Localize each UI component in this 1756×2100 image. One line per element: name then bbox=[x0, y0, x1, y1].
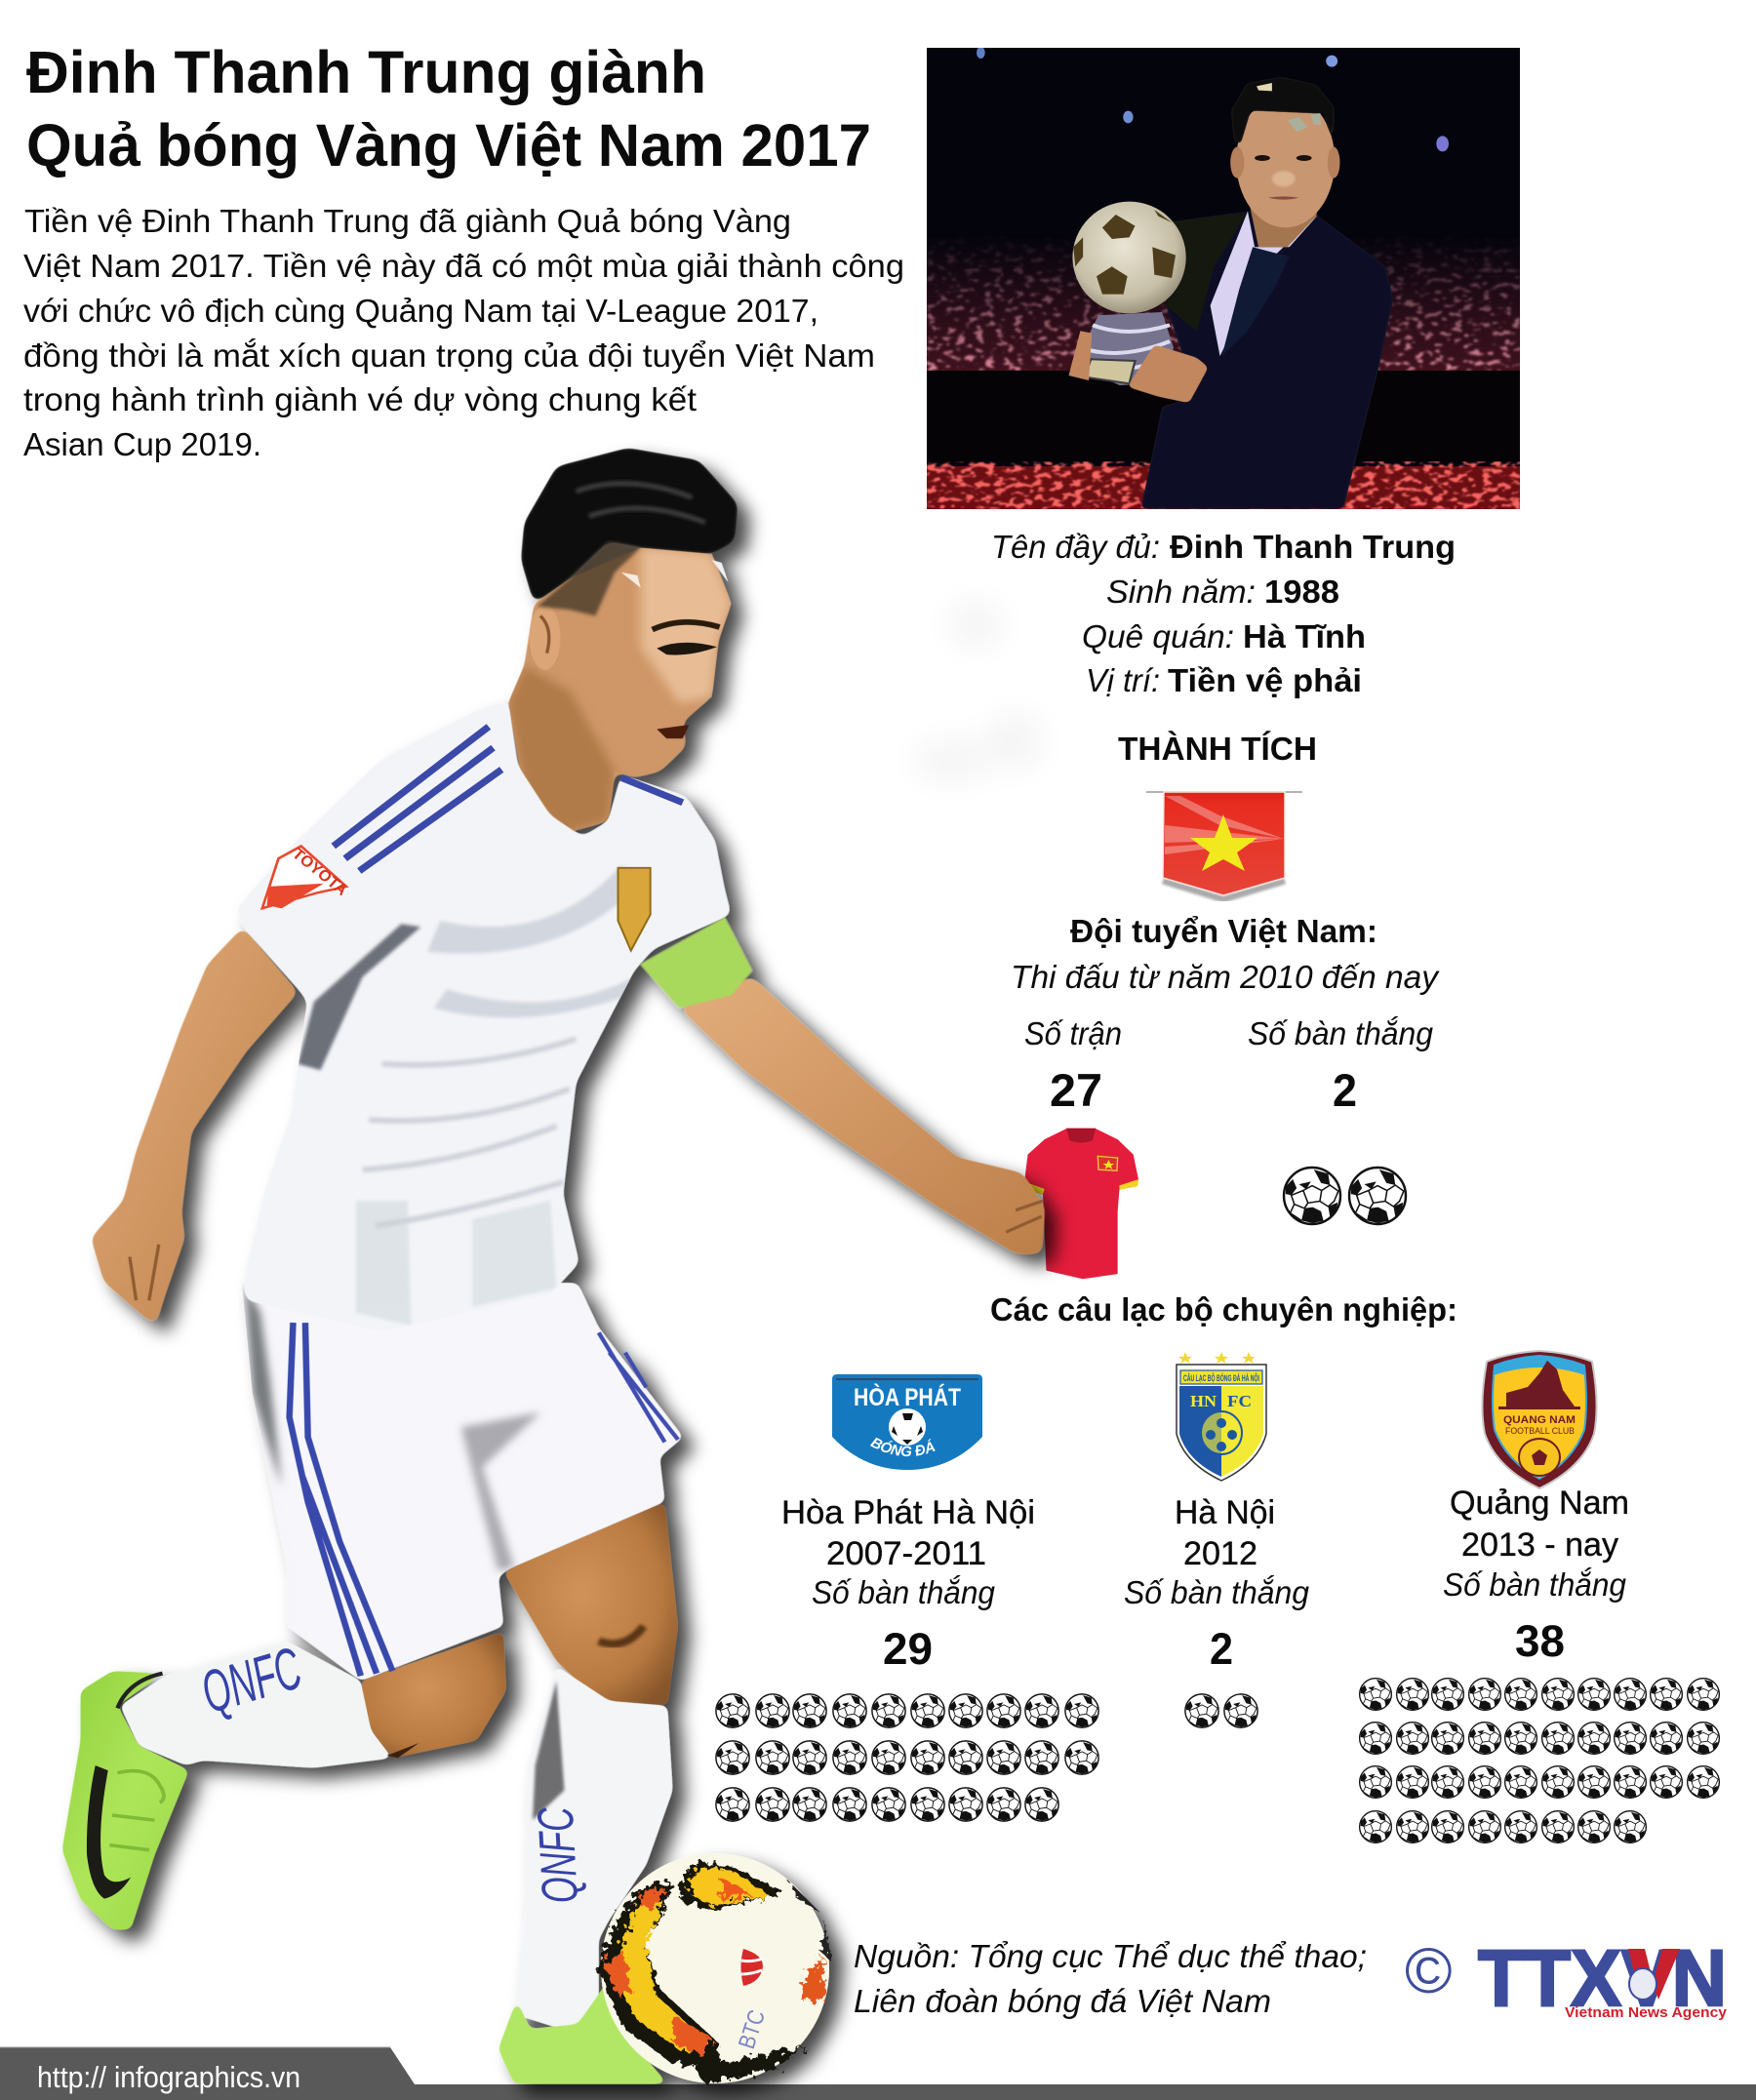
panel: Quang Nam: 2013 - nay bbox=[1461, 1526, 1618, 1564]
panel: Quang Nam: 38 bbox=[1515, 1616, 1565, 1666]
intro text block: Asian Cup 2019. bbox=[23, 426, 261, 462]
icon: Vietnam flag ribbon bbox=[1146, 792, 1302, 899]
goal balls: 38 bbox=[1360, 1679, 1719, 1842]
player info text: Tiền vệ phải bbox=[1168, 662, 1362, 698]
logo: Ha Noi FC: FC bbox=[1227, 1392, 1252, 1410]
back foot shoe bbox=[62, 1671, 189, 1929]
panel: Quang Nam: Quảng Nam bbox=[1450, 1485, 1629, 1522]
back thigh bbox=[361, 1631, 506, 1758]
logo: TTXVN: TTXVN bbox=[1478, 1934, 1727, 2023]
neck and face bbox=[508, 547, 732, 834]
player info text: Đinh Thanh Trung bbox=[1170, 529, 1456, 565]
left arm bbox=[91, 927, 298, 1326]
player info text: Vị trí: bbox=[1086, 662, 1160, 698]
panel: Hoa Phat Ha Noi: 29 bbox=[883, 1624, 933, 1674]
lower body: QNFC bbox=[528, 1805, 589, 1905]
panel: Hoa Phat Ha Noi: 2007-2011 bbox=[826, 1535, 986, 1572]
captain armband bbox=[641, 918, 752, 1008]
source note: Nguồn: Tổng cục Thể dục thể thao; bbox=[854, 1938, 1367, 1974]
goal balls: 2 bbox=[1185, 1694, 1257, 1727]
panel: Ha Noi: 2012 bbox=[1183, 1535, 1257, 1572]
shirt bbox=[236, 700, 732, 1331]
player info text bbox=[991, 529, 1456, 698]
panel: Hoa Phat Ha Noi: Số bàn thắng bbox=[812, 1574, 996, 1610]
footer url: http:// infographics.vn bbox=[37, 2060, 300, 2094]
source note: Liên đoàn bóng đá Việt Nam bbox=[854, 1983, 1271, 2019]
panel: Ha Noi: Số bàn thắng bbox=[1124, 1574, 1310, 1610]
logo: Quang Nam FC: FOOTBALL CLUB bbox=[1505, 1426, 1575, 1436]
shorts bbox=[242, 1283, 683, 1681]
footer band bbox=[0, 2047, 1756, 2100]
title: Đinh Thanh Trung giành bbox=[26, 39, 706, 105]
front shoe bbox=[499, 1979, 667, 2083]
back leg calf and sock bbox=[120, 1641, 392, 1768]
logo: Hoa Phat bbox=[832, 1374, 982, 1470]
logo: TTXVN: Vietnam News Agency bbox=[1565, 2004, 1728, 2021]
logo: Hoa Phat: HÒA PHÁT bbox=[854, 1382, 961, 1411]
club badge bbox=[618, 868, 651, 951]
intro text block: đồng thời là mắt xích quan trọng của đội tuyển Việt Nam bbox=[23, 337, 875, 374]
logo: Quang Nam FC: QUANG NAM bbox=[1503, 1414, 1576, 1426]
national team text: Thi đấu từ năm 2010 đến nay bbox=[1011, 959, 1441, 995]
national team text: Đội tuyển Việt Nam: bbox=[1070, 913, 1377, 949]
intro text block: Việt Nam 2017. Tiền vệ này đã có một mùa giải thành công bbox=[23, 248, 904, 284]
national team text bbox=[1011, 913, 1441, 1116]
match ball: BTC bbox=[734, 2006, 771, 2052]
panel: Ha Noi: Hà Nội bbox=[1175, 1494, 1275, 1531]
photo: player holding golden ball trophy bbox=[927, 47, 1520, 509]
lower body bbox=[62, 1283, 683, 2083]
front sock bbox=[514, 1666, 673, 2034]
player info text: 1988 bbox=[1264, 574, 1339, 610]
front thigh bbox=[503, 1502, 678, 1706]
panel: Hoa Phat Ha Noi bbox=[715, 1374, 1099, 1822]
logo: Ha Noi FC bbox=[1177, 1352, 1266, 1481]
right arm bbox=[679, 976, 1045, 1253]
player info text: Hà Tĩnh bbox=[1243, 618, 1366, 654]
player info text: Quê quán: bbox=[1082, 618, 1234, 654]
hair bbox=[521, 448, 738, 615]
icon: red national jersey bbox=[1023, 1129, 1138, 1279]
sleeve patch bbox=[262, 846, 351, 908]
match ball bbox=[597, 1853, 830, 2083]
shirt shading bbox=[298, 865, 641, 1326]
national team text: Số bàn thắng bbox=[1248, 1015, 1434, 1051]
panel: Ha Noi: 2 bbox=[1210, 1624, 1233, 1674]
player info text: Tên đầy đủ: bbox=[991, 529, 1160, 565]
player cutout: running footballer with ball bbox=[62, 448, 1045, 2083]
national team text: 27 bbox=[1050, 1064, 1102, 1116]
title bbox=[26, 39, 871, 178]
logo: TTXVN: © bbox=[1405, 1934, 1453, 2006]
icon: national team goal balls bbox=[1284, 1168, 1406, 1224]
player info text: Sinh năm: bbox=[1106, 574, 1256, 610]
logo: Hoa Phat: BÓNG ĐÁ bbox=[870, 1438, 936, 1457]
goal balls: 29 bbox=[716, 1694, 1098, 1821]
intro text block: Tiền vệ Đinh Thanh Trung đã giành Quả bóng Vàng bbox=[24, 203, 791, 239]
logo: Quang Nam FC bbox=[1482, 1351, 1597, 1488]
logo: Ha Noi FC: CÂU LẠC BỘ BÓNG ĐÁ HÀ NỘI bbox=[1183, 1372, 1259, 1383]
intro text block: với chức vô địch cùng Quảng Nam tại V-League 2017, bbox=[23, 293, 818, 329]
sleeve patch: TOYOTA bbox=[289, 846, 351, 899]
heading: achievements: THÀNH TÍCH bbox=[1118, 731, 1317, 767]
national team text: Số trận bbox=[1024, 1015, 1122, 1051]
logo: Ha Noi FC: HN bbox=[1190, 1392, 1217, 1410]
panel: Hoa Phat Ha Noi: Hòa Phát Hà Nội bbox=[781, 1494, 1035, 1531]
intro text block: trong hành trình giành vé dự vòng chung kết bbox=[23, 381, 697, 417]
panel: Quang Nam bbox=[1360, 1351, 1719, 1842]
national team text: 2 bbox=[1333, 1064, 1357, 1116]
panel: Quang Nam: Số bàn thắng bbox=[1443, 1566, 1627, 1603]
shorts side stripes bbox=[290, 1323, 392, 1676]
panel: Ha Noi bbox=[1124, 1352, 1310, 1727]
shoulder stripes bbox=[334, 727, 683, 871]
title: Quả bóng Vàng Việt Nam 2017 bbox=[26, 112, 871, 178]
faint background smudges bbox=[912, 600, 1044, 782]
heading: professional clubs: Các câu lạc bộ chuyên nghiệp: bbox=[990, 1291, 1457, 1327]
source note bbox=[854, 1938, 1367, 2019]
intro text block bbox=[23, 203, 904, 462]
sock text back: QNFC bbox=[193, 1635, 310, 1725]
upper body bbox=[91, 448, 1045, 1331]
